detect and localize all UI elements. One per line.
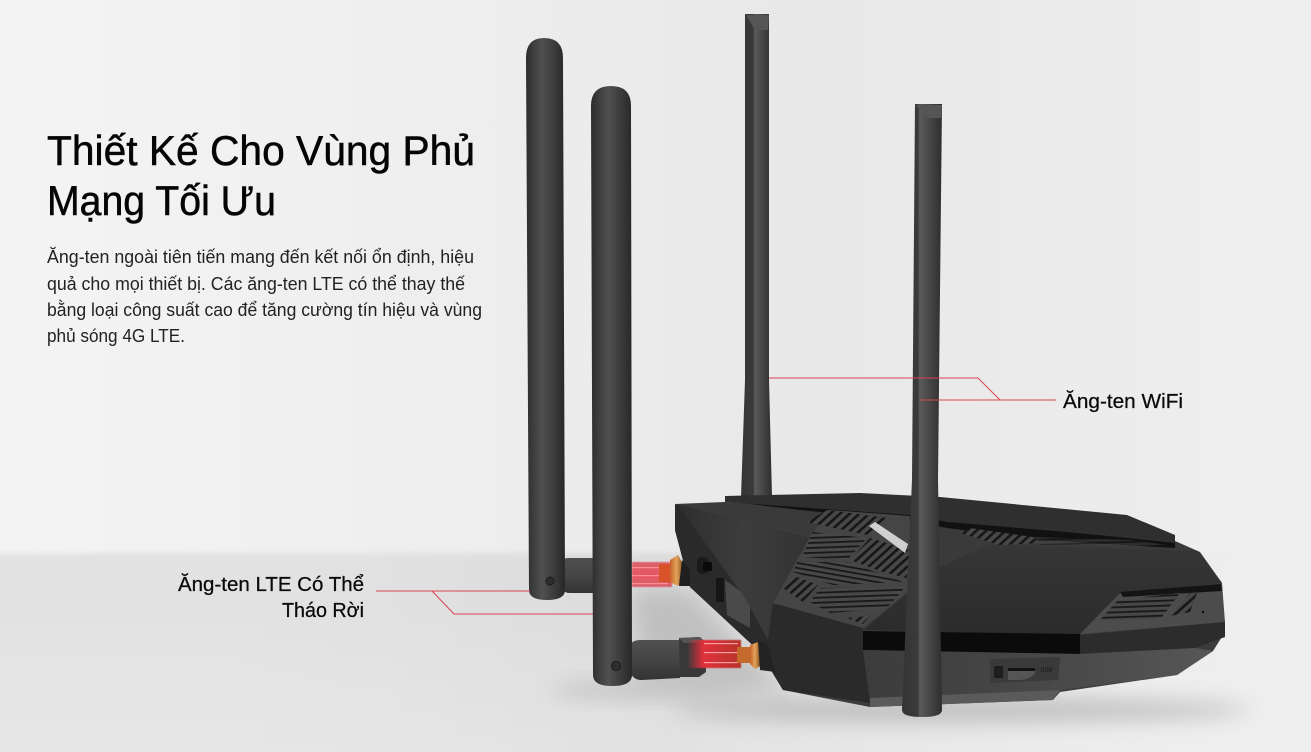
front connector (630, 637, 706, 680)
rear LTE antenna connector (563, 558, 593, 593)
description text (47, 247, 482, 346)
red highlight beam, rear connector (632, 555, 690, 587)
grille base (773, 510, 910, 628)
callout line: LTE lower (432, 591, 606, 614)
body underlay (675, 504, 863, 690)
title: Mạng Tối Ưu (47, 177, 276, 224)
rear LTE antenna (526, 38, 565, 600)
description text: Ăng-ten ngoài tiên tiến mang đến kết nối ổn định, hiệu (47, 247, 474, 267)
description text: bằng loại công suất cao để tăng cường tín hiệu và vùng (47, 299, 482, 320)
side vents (1100, 593, 1204, 620)
port side (675, 505, 783, 690)
label: LTE antenna: Ăng-ten LTE Có Thể (178, 573, 364, 596)
description text: phủ sóng 4G LTE. (47, 326, 185, 346)
rear WiFi antenna (741, 14, 772, 497)
red highlight beam, front connector (687, 640, 775, 672)
right band (1080, 622, 1225, 654)
callout line: WiFi rear (769, 378, 1056, 400)
label: WiFi antenna: Ăng-ten WiFi (1063, 390, 1183, 413)
top surface (675, 502, 1225, 660)
right side panel (1080, 584, 1225, 634)
callout line: WiFi front (920, 399, 1056, 401)
front-left dark facet (677, 504, 810, 640)
callout line: LTE upper (376, 590, 530, 592)
title: Thiết Kế Cho Vùng Phủ (47, 127, 475, 174)
label: LTE antenna: Tháo Rời (282, 600, 364, 622)
black recess under cover (725, 501, 1175, 548)
SIM slot: SIM (1040, 667, 1053, 674)
lower front shell (768, 603, 870, 703)
front WiFi antenna (902, 104, 942, 717)
front dark panel (863, 545, 1222, 635)
front LTE antenna (591, 86, 632, 686)
description text: quả cho mọi thiết bị. Các ăng-ten LTE có thể thay thế (47, 274, 465, 294)
bottom shell (863, 648, 1213, 698)
router body (675, 493, 1225, 707)
label: LTE antenna (178, 573, 364, 622)
SIM slot (990, 657, 1060, 683)
back cover (725, 493, 1175, 543)
title (47, 127, 475, 224)
brand logo (869, 522, 908, 553)
port details (697, 557, 724, 602)
top grille vents (783, 510, 1175, 624)
port label (725, 580, 750, 628)
black band (863, 631, 1080, 654)
lower side shell (760, 603, 1225, 707)
